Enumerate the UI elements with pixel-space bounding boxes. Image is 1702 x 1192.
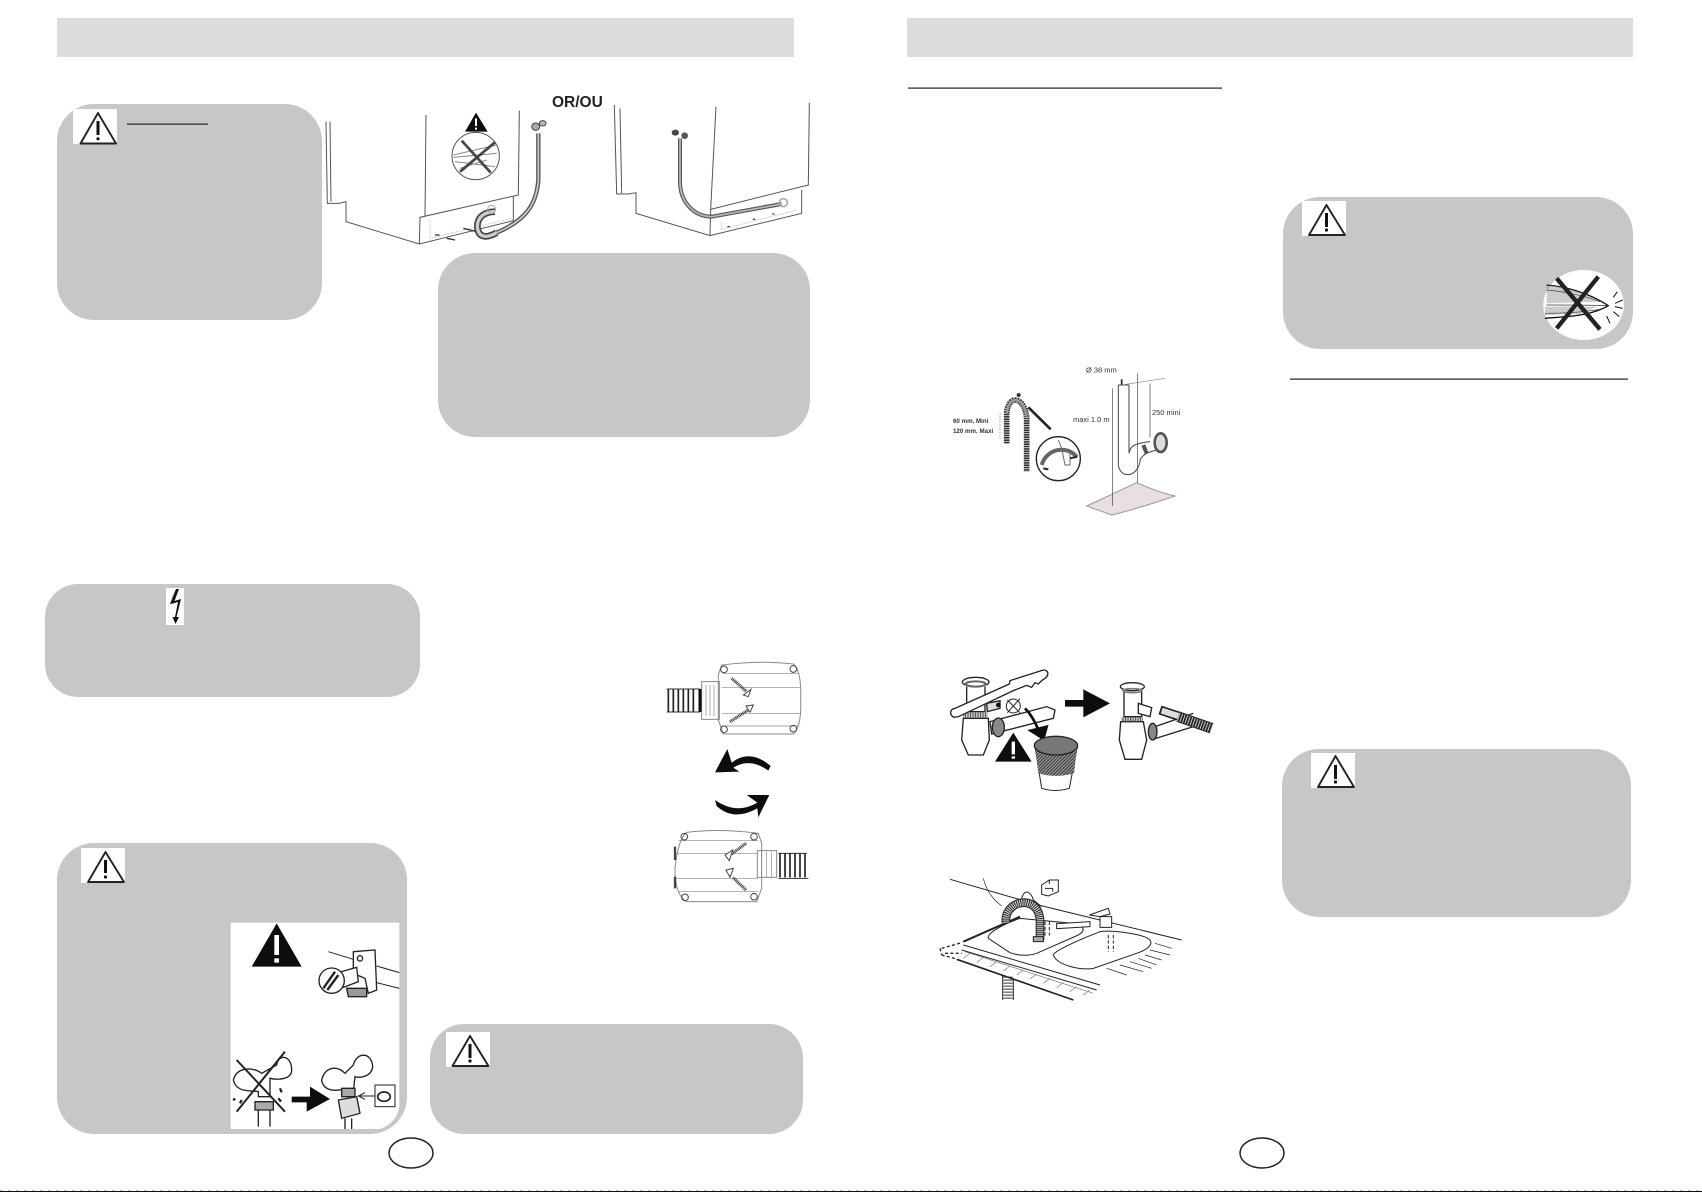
panel: top-middle note — [438, 253, 810, 437]
heading underline — [127, 124, 208, 125]
dimension labels: maxi 1.0 m — [1073, 415, 1110, 424]
dimension labels — [953, 365, 1181, 435]
tap — [1057, 908, 1112, 929]
panel: bottom-middle warning — [430, 1024, 803, 1134]
right machine — [614, 103, 809, 236]
magnifier and pointer — [1028, 407, 1080, 481]
siphon after — [1119, 683, 1193, 759]
left hose and tap — [477, 121, 546, 236]
icon: crossed plug — [1006, 699, 1020, 713]
left machine — [326, 111, 519, 244]
icon: warning triangle — [1311, 753, 1355, 788]
icon: warning triangle on left machine — [465, 113, 488, 132]
hose U-shape — [1000, 393, 1027, 472]
wall hook — [1042, 880, 1058, 896]
icon: crossed-out crushed hose — [1543, 270, 1624, 340]
illustration: siphon plug removal and connection — [951, 670, 1212, 790]
illustration: drain hose heights — [953, 365, 1181, 515]
right hose and tap — [672, 130, 787, 217]
illustration: hose hooked over sink — [940, 878, 1182, 1000]
wrench — [951, 670, 1048, 717]
page number oval: right — [1240, 1138, 1284, 1168]
illustration: tap fitting and seal — [231, 923, 399, 1129]
header bar: left page — [57, 18, 794, 57]
icon: warning triangle — [446, 1032, 490, 1067]
bottom edge line — [0, 1190, 1702, 1192]
rotation arrows — [715, 749, 771, 817]
curved arrow — [1025, 708, 1047, 739]
section heading underline: right column — [1290, 378, 1628, 380]
connected hose — [1160, 710, 1212, 728]
panel: right-column warning with hose icon — [1283, 197, 1633, 349]
icon: lightning bolt — [166, 588, 184, 625]
header bar: right page — [907, 18, 1633, 57]
illustration: water inlet hose connection, two options — [326, 103, 809, 244]
icon: warning triangle — [995, 733, 1032, 762]
panel: lower-right warning — [1282, 749, 1631, 917]
bottom fitting — [675, 831, 808, 902]
icon: warning triangle — [73, 109, 117, 144]
siphon pipe — [1113, 373, 1167, 506]
sink basins — [988, 918, 1151, 969]
valve on pipe — [319, 950, 399, 997]
dimension labels: Ø 38 mm — [1086, 365, 1117, 374]
cup — [1034, 736, 1078, 790]
icon: warning triangle — [81, 848, 125, 883]
icon: crossed-out kinked hose — [452, 132, 499, 180]
drain hose arc — [983, 878, 1043, 942]
label: OR/OU: OR/OU — [552, 94, 603, 111]
illustration: drain hose fitting rotation — [667, 662, 808, 902]
top fitting — [667, 662, 801, 734]
worktop edges — [940, 879, 1182, 1000]
dimension labels: 60 mm. Mini — [953, 418, 989, 425]
section heading underline: right page left column — [908, 88, 1222, 89]
panel: top-left warning — [57, 104, 322, 320]
correct tap with seal — [322, 1055, 395, 1129]
arrow — [292, 1087, 330, 1112]
siphon before — [962, 677, 1055, 755]
icon: warning triangle — [1302, 201, 1346, 236]
crossed-out leaking tap — [233, 1052, 292, 1127]
panel: tap warning with illustration — [57, 843, 407, 1134]
panel: electrical warning — [45, 584, 420, 697]
dimension labels: 250 mini — [1152, 408, 1181, 417]
waste pipe — [1003, 976, 1013, 1000]
floor shadow — [1087, 483, 1175, 515]
dimension labels: 120 mm. Maxi — [953, 428, 994, 435]
icon: warning triangle — [252, 923, 302, 967]
page number oval: left — [389, 1138, 433, 1168]
big arrow — [1065, 689, 1110, 717]
